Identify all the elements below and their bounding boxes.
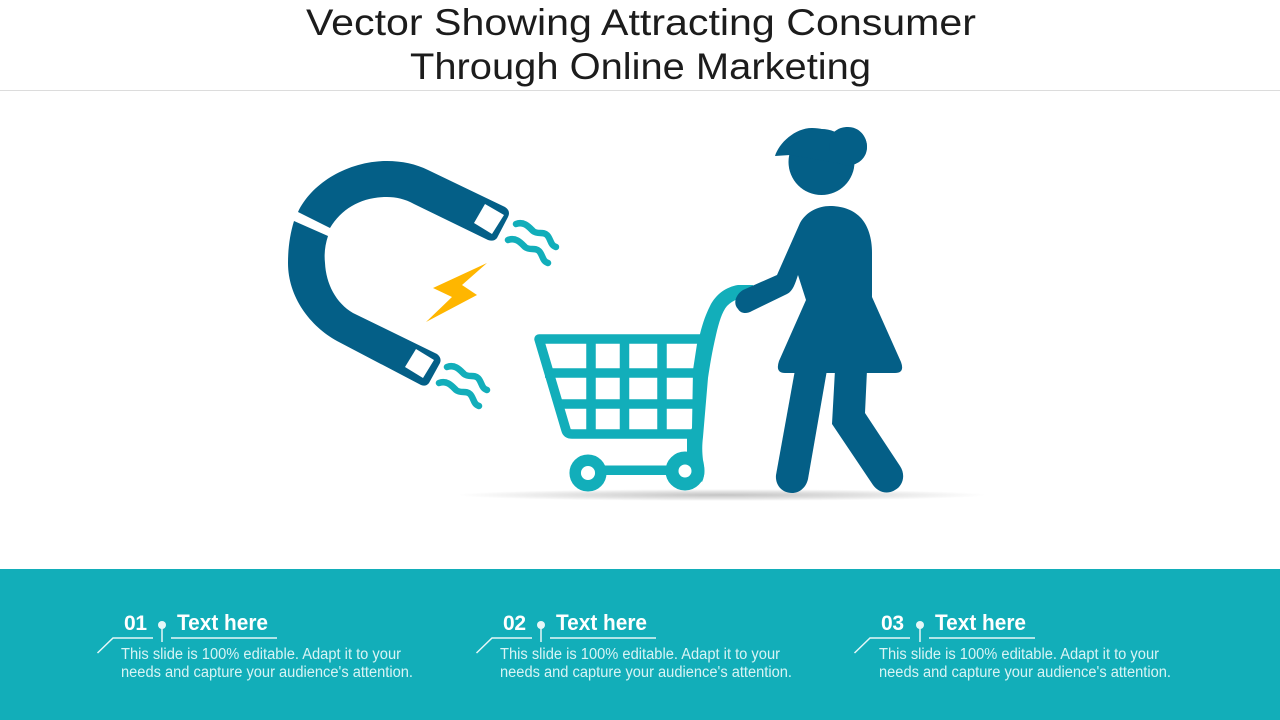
panel: item 02 xyxy=(476,610,792,681)
number 03: 03 xyxy=(881,612,904,635)
text block 02: needs and capture your audience's attention. xyxy=(500,664,792,681)
panel: item 03 xyxy=(854,610,1171,681)
number 01: 01 xyxy=(124,612,147,635)
text block 03 xyxy=(879,646,1171,681)
text block 01: This slide is 100% editable. Adapt it to your xyxy=(121,646,401,663)
footer band xyxy=(0,569,1280,720)
icon: magnetic waves xyxy=(439,223,556,406)
text block 02: This slide is 100% editable. Adapt it to your xyxy=(500,646,780,663)
text block 01: needs and capture your audience's attention. xyxy=(121,664,413,681)
title: Through Online Marketing xyxy=(410,45,871,87)
panel: item 01 xyxy=(98,610,413,681)
heading 02: Text here xyxy=(556,610,647,635)
ground shadow xyxy=(457,489,987,501)
icon: woman shopper xyxy=(735,127,903,493)
heading 01: Text here xyxy=(177,610,268,635)
text block 03: needs and capture your audience's attention. xyxy=(879,664,1171,681)
number 02: 02 xyxy=(503,612,526,635)
title: Vector Showing Attracting Consumer xyxy=(306,1,976,43)
text block 03: This slide is 100% editable. Adapt it to your xyxy=(879,646,1159,663)
heading 03: Text here xyxy=(935,610,1026,635)
text block 01 xyxy=(121,646,413,681)
title xyxy=(306,1,976,87)
icon: lightning bolt xyxy=(426,263,487,322)
icon: shopping cart xyxy=(539,285,753,486)
text block 02 xyxy=(500,646,792,681)
icon: horseshoe magnet xyxy=(288,161,509,386)
